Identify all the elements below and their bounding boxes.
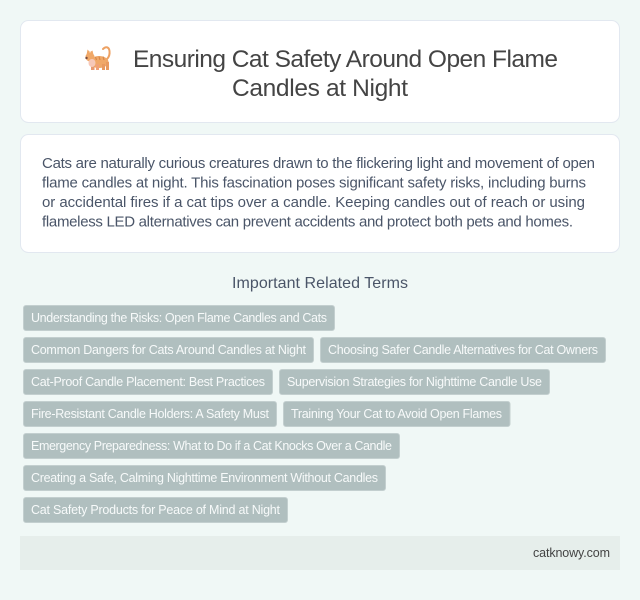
title: Candles at Night — [232, 75, 408, 102]
tag: placement: Cat-Proof Candle Placement: Best Practices — [31, 375, 265, 389]
tag: understanding the risks: Understanding the Risks: Open Flame Candles and Cats — [31, 311, 327, 325]
description text: or accidental fires if a cat tips over a candle. Keeping candles out of reach or using — [42, 194, 585, 211]
tag: candle holders — [24, 402, 276, 426]
title: Ensuring Cat Safety Around Open Flame — [133, 46, 558, 73]
tag: supervision — [280, 370, 550, 394]
tag: placement — [24, 370, 272, 394]
icon: cat — [85, 47, 110, 70]
tag: safer alternatives: Choosing Safer Candle Alternatives for Cat Owners — [328, 343, 598, 357]
tag: emergency — [24, 434, 400, 458]
title — [133, 46, 558, 102]
panel: title card — [20, 20, 620, 122]
tag: products: Cat Safety Products for Peace of Mind at Night — [31, 503, 281, 517]
tag: common dangers — [24, 338, 314, 362]
tag: calm environment — [24, 466, 386, 490]
tag: calm environment: Creating a Safe, Calming Nighttime Environment Without Candles — [31, 471, 378, 485]
tag: safer alternatives — [320, 338, 606, 362]
tag: emergency: Emergency Preparedness: What to Do if a Cat Knocks Over a Candle — [31, 439, 392, 453]
tag: understanding the risks — [24, 306, 334, 330]
tag: common dangers: Common Dangers for Cats Around Candles at Night — [31, 343, 307, 357]
description text — [42, 155, 595, 230]
tag list — [24, 306, 606, 522]
tag: training — [284, 402, 510, 426]
tag: products — [24, 498, 288, 522]
tag: candle holders: Fire-Resistant Candle Holders: A Safety Must — [31, 407, 270, 421]
footer — [20, 536, 620, 570]
panel: description — [20, 134, 620, 252]
description text: flame candles at night. This fascination poses significant safety risks, including burns — [42, 174, 586, 192]
description text: Cats are naturally curious creatures drawn to the flickering light and movement of open — [42, 155, 595, 172]
tag: supervision: Supervision Strategies for Nighttime Candle Use — [287, 375, 542, 389]
description text: flameless LED alternatives can prevent accidents and protect both pets and homes. — [42, 214, 573, 230]
tag: training: Training Your Cat to Avoid Open Flames — [291, 407, 502, 421]
heading: related terms: Important Related Terms — [232, 275, 408, 292]
footer: catknowy.com — [533, 546, 610, 560]
